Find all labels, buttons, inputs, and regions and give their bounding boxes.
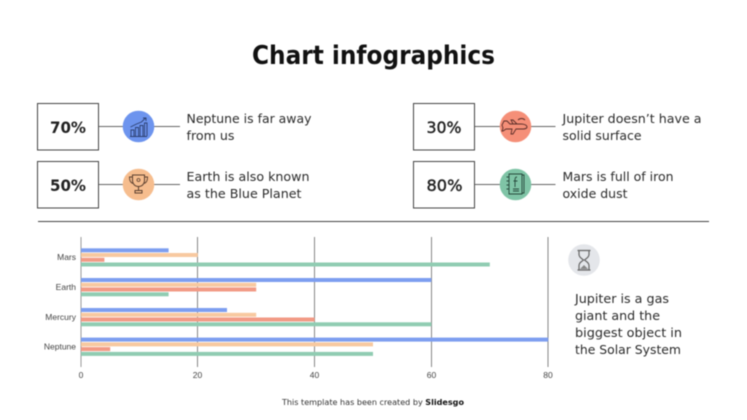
value 30%: 30% [426, 118, 462, 137]
bars: Mars [81, 248, 490, 266]
bar chart [44, 237, 553, 380]
percentage box 80% [414, 162, 474, 208]
bars: Neptune [81, 338, 548, 356]
icon: growth chart [123, 111, 154, 142]
category labels [44, 252, 77, 352]
bars: Earth [81, 278, 431, 296]
stat row: Jupiter 30% [414, 104, 702, 150]
axis labels [79, 370, 553, 380]
bars: Mercury [81, 308, 431, 326]
text: Jupiter note: Jupiter is a gas [574, 291, 669, 306]
stat row: Earth 50% [38, 162, 310, 208]
description: Jupiter: solid surface [562, 128, 642, 143]
axis labels: 0 [79, 370, 84, 380]
category labels: Mercury [45, 312, 77, 322]
stat row: Mars 80% [414, 162, 674, 208]
description: Earth [186, 169, 310, 201]
percentage box 50% [38, 162, 98, 208]
description: Mars [562, 169, 674, 201]
text: Jupiter note: giant and the [575, 308, 660, 323]
title: Chart infographics [252, 41, 495, 71]
value 80%: 80% [426, 176, 462, 195]
description: Neptune: from us [186, 128, 234, 143]
percentage box 70% [38, 104, 98, 150]
axis labels: 20 [193, 370, 202, 380]
percentage box 30% [414, 104, 474, 150]
description: Jupiter: Jupiter doesn’t have a [561, 111, 702, 126]
text: Jupiter note: biggest object in [575, 325, 682, 340]
category labels: Earth [56, 282, 76, 292]
icon: airplane [500, 111, 531, 142]
axis labels: 40 [310, 370, 319, 380]
stat row: Neptune 70% [38, 104, 312, 150]
description: Jupiter [561, 111, 702, 143]
text: Jupiter note: the Solar System [575, 342, 681, 357]
description: Earth: as the Blue Planet [186, 186, 302, 201]
icon: notebook [500, 169, 531, 200]
footer credit: This template has been created by Slidesgo [281, 398, 464, 407]
category labels: Neptune [44, 342, 76, 352]
axis labels: 60 [427, 370, 436, 380]
category labels: Mars [57, 252, 76, 262]
value 50%: 50% [50, 176, 86, 195]
description: Mars: oxide dust [562, 186, 628, 201]
description: Earth: Earth is also known [186, 169, 310, 184]
description: Neptune [186, 111, 312, 143]
axis labels: 80 [543, 370, 553, 380]
text: Jupiter note [574, 291, 682, 357]
icon: trophy [123, 169, 154, 200]
description: Neptune: Neptune is far away [186, 111, 312, 126]
icon: hourglass [568, 244, 600, 276]
value 70%: 70% [50, 118, 86, 137]
description: Mars: Mars is full of iron [562, 169, 674, 184]
